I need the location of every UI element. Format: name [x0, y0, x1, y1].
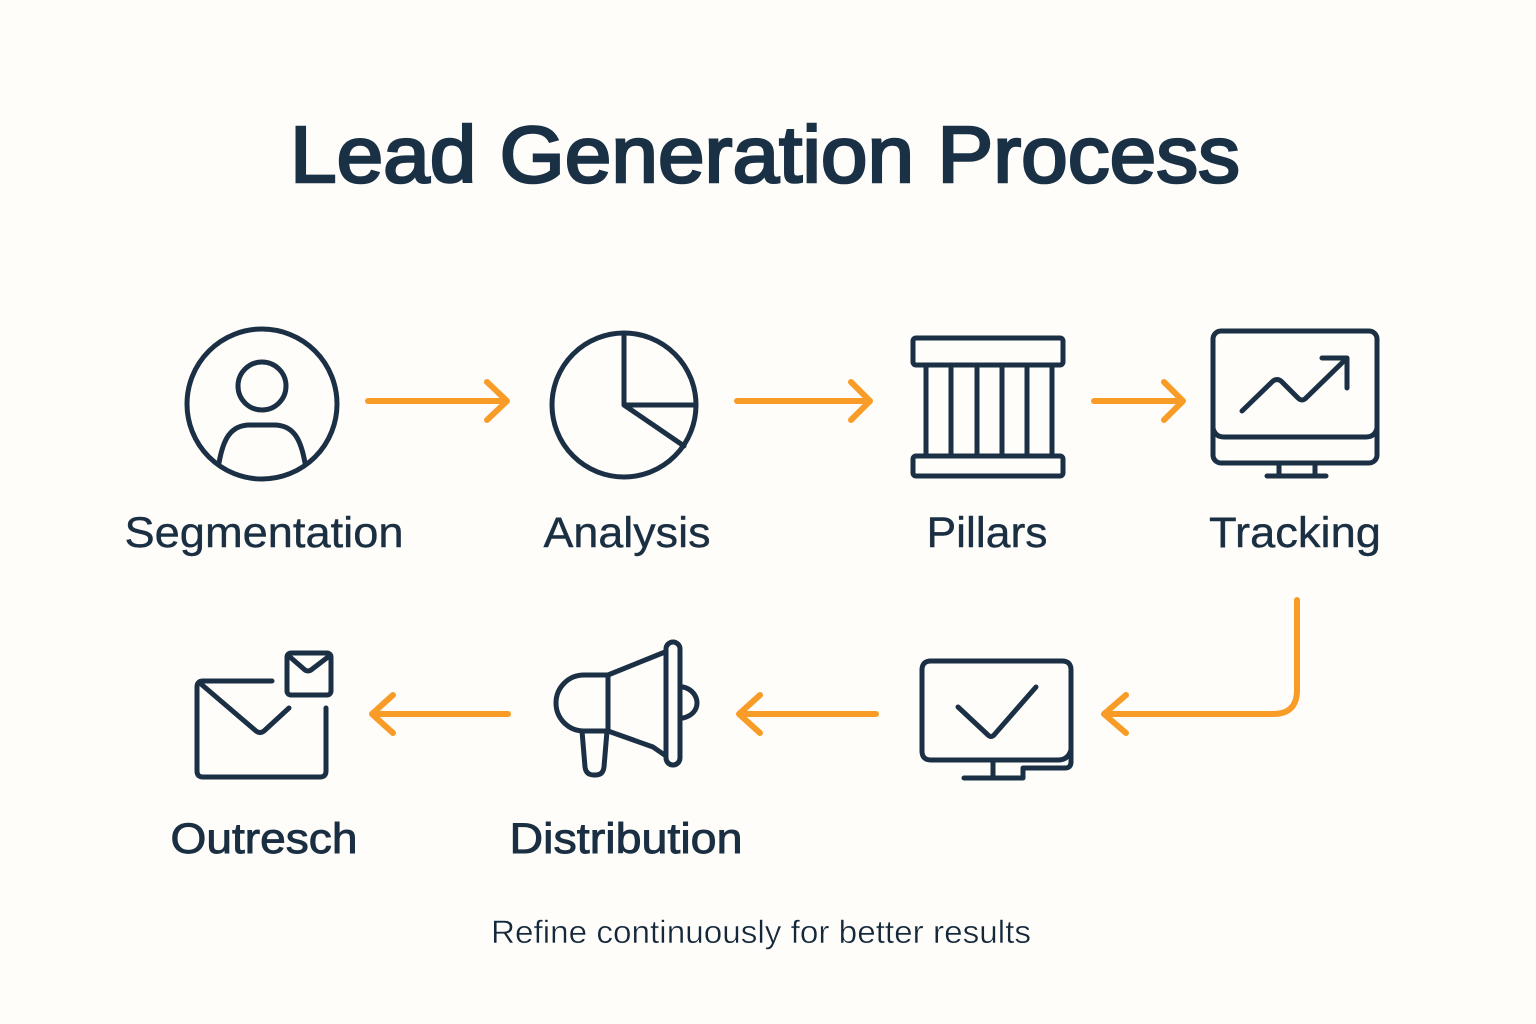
icon: segmentation person — [187, 329, 337, 479]
icon: distribution megaphone — [556, 642, 697, 775]
arrow: segmentation to analysis — [368, 382, 507, 420]
label: Analysis: Analysis — [544, 509, 710, 557]
label: Tracking: Tracking — [1209, 509, 1381, 557]
label: Pillars: Pillars — [926, 509, 1048, 557]
title: Lead Generation Process — [290, 110, 1240, 199]
arrow: pillars to tracking — [1094, 382, 1183, 420]
icon: pillars — [913, 338, 1063, 476]
footer caption: Refine continuously for better results — [491, 914, 1031, 950]
icon: check monitor — [922, 661, 1071, 778]
arrow: distribution to outreach — [372, 695, 508, 733]
label: Outresch: Outresch — [170, 815, 358, 863]
icon: analysis pie chart — [552, 333, 696, 477]
label: Segmentation: Segmentation — [124, 509, 404, 557]
icon: tracking monitor — [1213, 331, 1377, 476]
icon: outreach envelope — [197, 653, 331, 777]
label: Distribution: Distribution — [510, 815, 742, 863]
arrow: analysis to pillars — [737, 382, 870, 420]
arrow: tracking down to check monitor — [1104, 600, 1297, 733]
arrow: check monitor to distribution — [739, 695, 876, 733]
